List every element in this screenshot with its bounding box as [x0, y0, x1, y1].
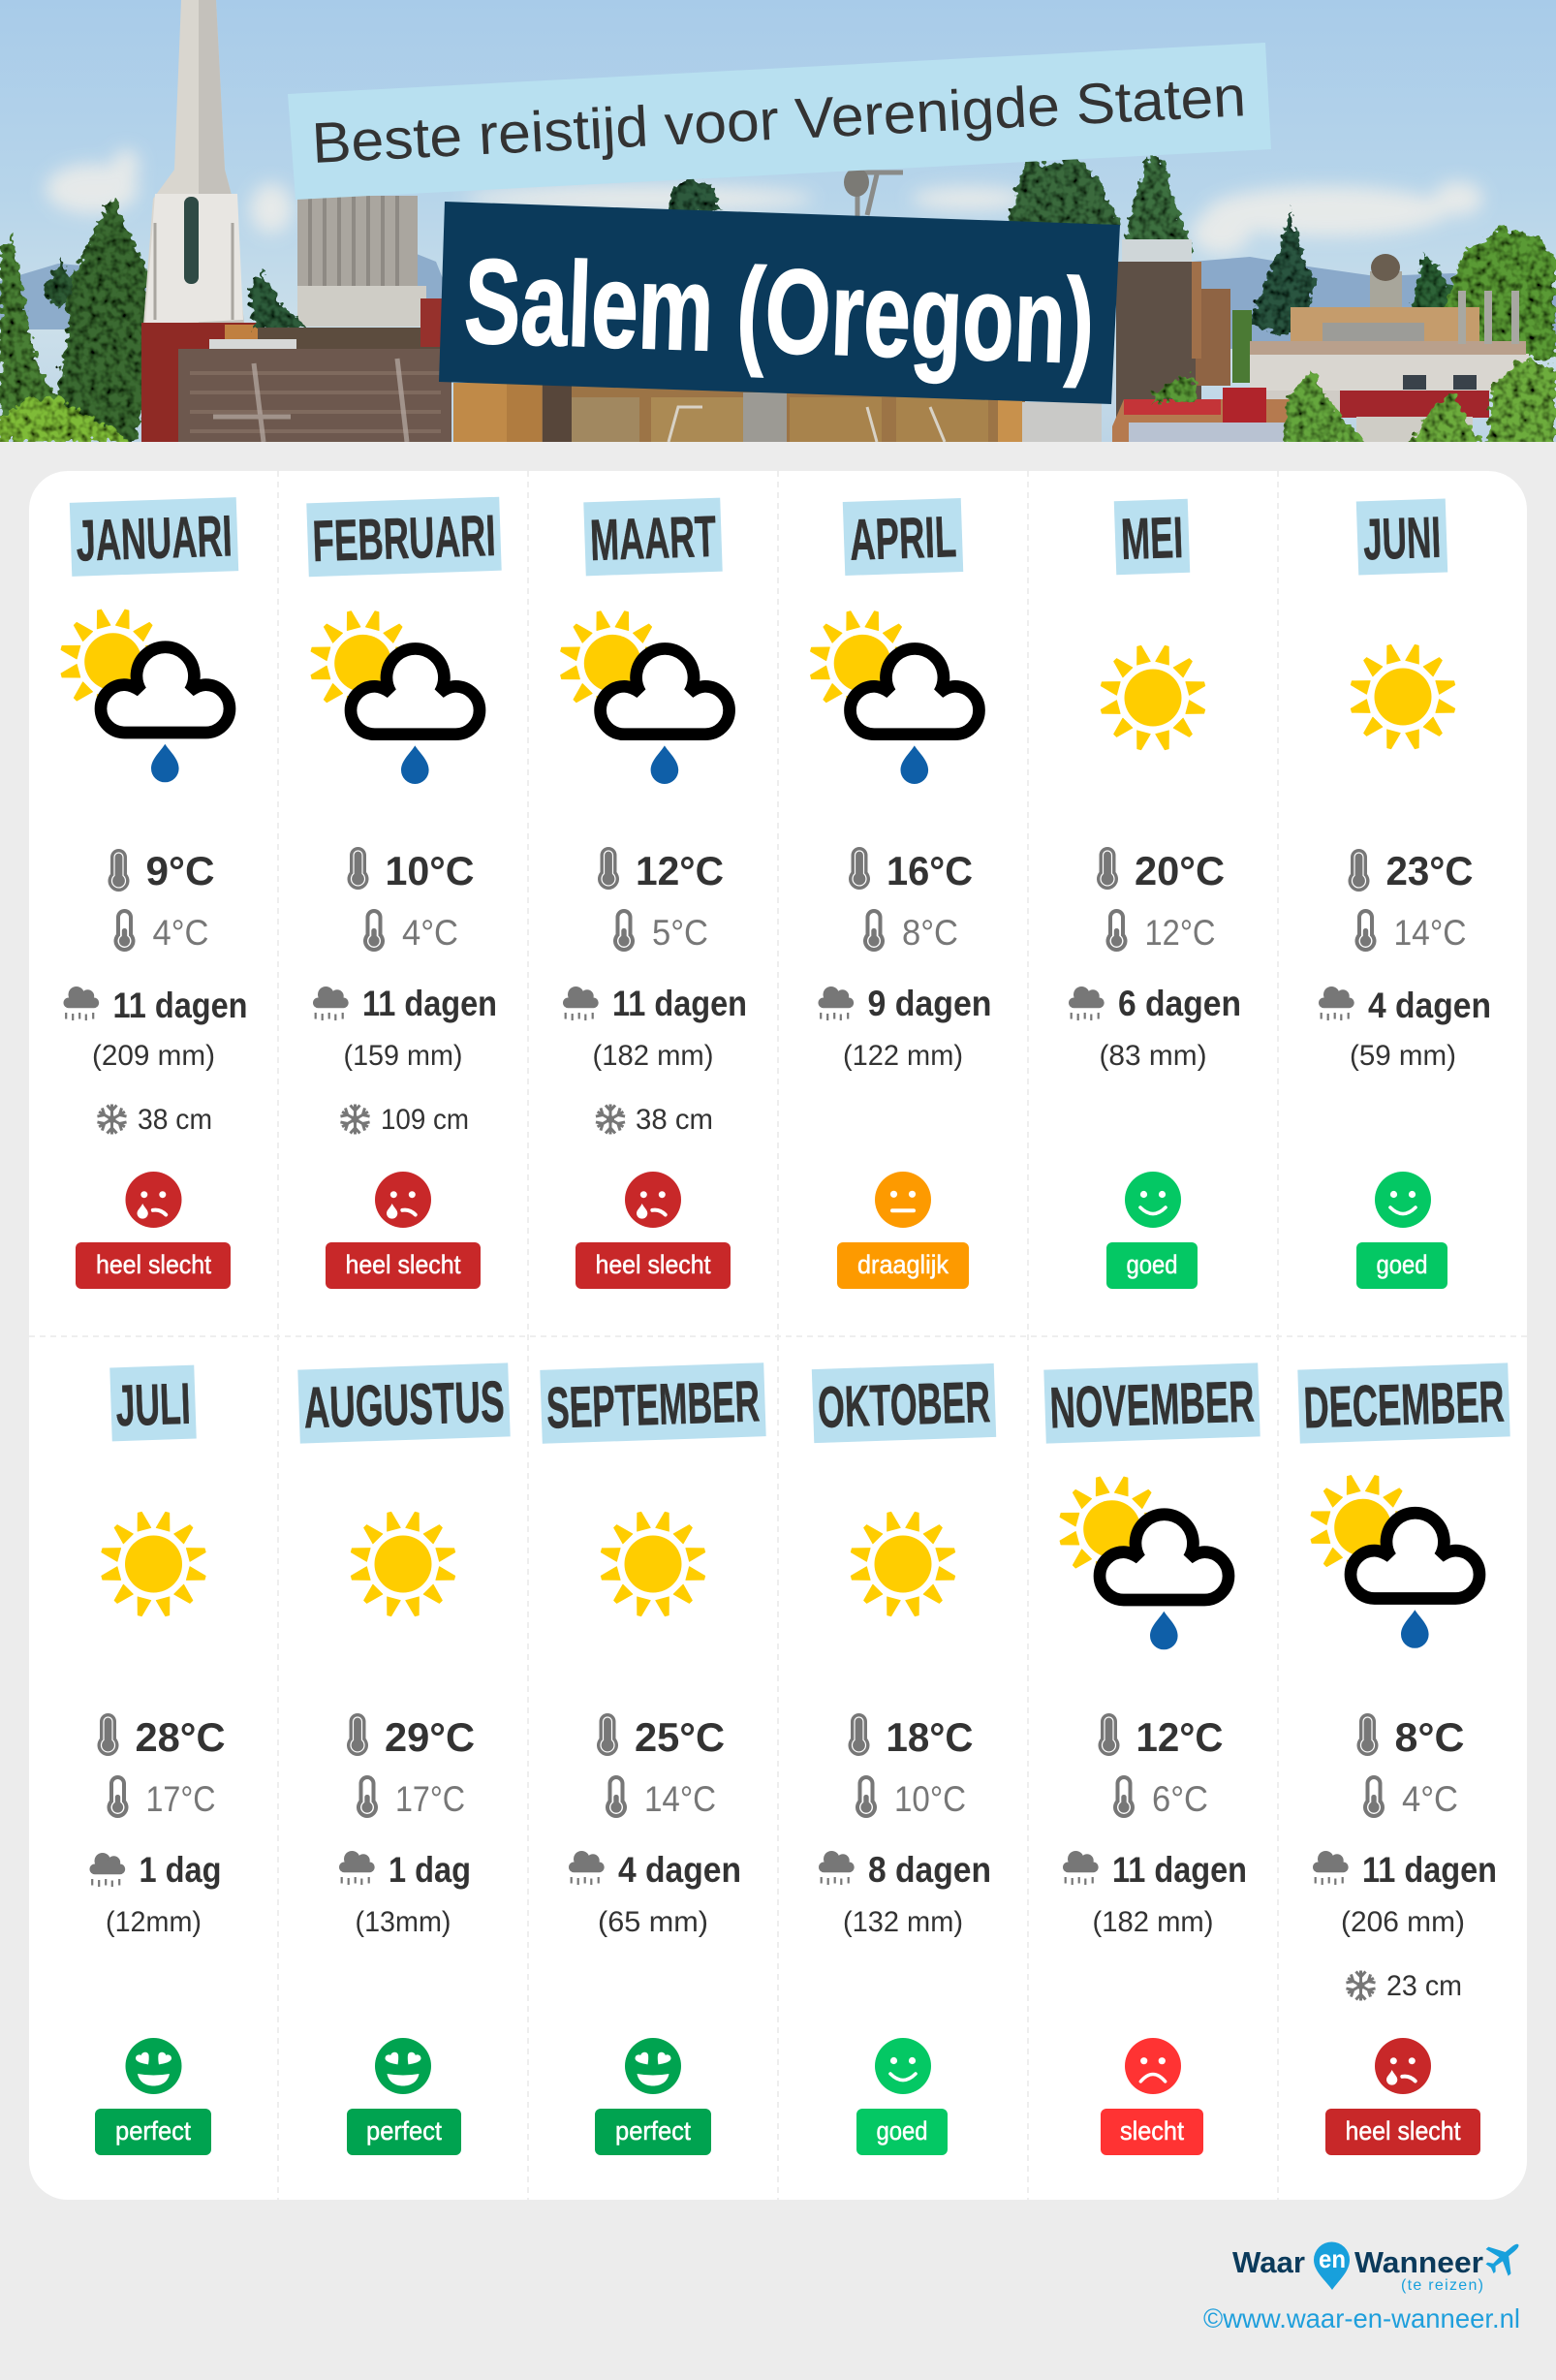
maximum temperature	[109, 848, 215, 893]
panel: september	[540, 1362, 766, 2155]
footer website copyright: ©www.waar-en-wanneer.nl	[1203, 2303, 1520, 2333]
rain days: 1 dag	[140, 1850, 221, 1890]
panel: januari	[60, 497, 248, 1289]
month label	[1043, 1362, 1260, 1444]
minimum temperature: 4°C	[153, 913, 209, 953]
rating badge: goed	[1126, 1250, 1178, 1279]
minimum temperature: 12°C	[1145, 913, 1215, 953]
minimum temperature	[363, 909, 458, 953]
snowfall	[97, 1104, 212, 1136]
minimum temperature	[863, 909, 958, 953]
rating badge: heel slecht	[595, 1250, 711, 1279]
rating face	[625, 2038, 681, 2094]
rain days	[569, 1850, 741, 1890]
water tower	[857, 172, 903, 218]
snowfall	[1346, 1970, 1462, 2002]
month label	[812, 1363, 996, 1443]
rain days	[1319, 986, 1491, 1025]
minimum temperature	[357, 1775, 465, 1819]
rainfall: (65 mm)	[598, 1906, 708, 1938]
rating badge	[1106, 1242, 1198, 1289]
rainfall: (122 mm)	[843, 1040, 963, 1072]
snowfall	[595, 1104, 713, 1136]
panel: augustus	[297, 1362, 511, 2155]
lower right trees	[1283, 370, 1364, 442]
rain days	[64, 986, 248, 1025]
subtitle banner	[288, 43, 1271, 200]
rating badge: perfect	[615, 2116, 691, 2145]
maximum temperature	[1349, 848, 1473, 893]
month label	[843, 498, 963, 576]
rating badge: draaglijk	[857, 1250, 949, 1279]
rainfall: (206 mm)	[1341, 1906, 1465, 1938]
rating badge	[837, 1242, 969, 1289]
maximum temperature: 29°C	[385, 1714, 475, 1760]
campus buildings	[1291, 307, 1479, 341]
icon: sun behind cloud with rain drop	[1059, 1476, 1229, 1649]
rating face	[126, 2038, 182, 2094]
maximum temperature	[97, 1713, 225, 1760]
rating badge	[1356, 1242, 1447, 1289]
panel: april	[809, 498, 992, 1289]
right brown tower	[1122, 239, 1192, 263]
panel: december	[1297, 1362, 1510, 2155]
icon: sun behind cloud with rain drop	[310, 610, 480, 784]
maximum temperature	[849, 847, 973, 893]
minimum temperature	[1113, 1775, 1208, 1819]
snowfall	[340, 1104, 469, 1136]
icon: airplane	[1478, 2231, 1530, 2282]
rating face	[375, 2038, 431, 2094]
minimum temperature: 8°C	[902, 913, 958, 953]
maximum temperature	[597, 1713, 725, 1760]
maximum temperature	[347, 847, 475, 893]
icon: sun behind cloud with rain drop	[809, 610, 979, 784]
maximum temperature: 20°C	[1135, 848, 1225, 893]
panel: februari	[306, 497, 502, 1289]
month label	[306, 497, 502, 577]
rain days: 4 dagen	[1368, 986, 1491, 1025]
rainfall: (209 mm)	[92, 1040, 215, 1072]
maximum temperature	[1099, 1713, 1223, 1760]
maximum temperature: 8°C	[1395, 1714, 1465, 1760]
rating face	[875, 2038, 931, 2094]
rating badge: perfect	[115, 2116, 191, 2145]
month label: SEPTEMBER	[545, 1368, 761, 1441]
title banner	[439, 202, 1120, 404]
footer logo: Waar en Wanneer: Wanneer	[1354, 2245, 1483, 2279]
minimum temperature	[1363, 1775, 1458, 1819]
rainfall: (59 mm)	[1350, 1040, 1456, 1072]
snowfall: 23 cm	[1386, 1970, 1462, 2002]
snowfall: 109 cm	[381, 1104, 469, 1136]
rating badge: slecht	[1120, 2116, 1184, 2145]
month label: APRIL	[849, 504, 957, 573]
footer logo: Waar en Wanneer: (te reizen)	[1401, 2277, 1483, 2294]
rain days: 6 dagen	[1118, 984, 1241, 1023]
rating badge: goed	[1376, 1250, 1428, 1279]
rain days: 11 dagen	[112, 986, 248, 1025]
right conifer and dome	[1252, 204, 1318, 336]
panel: juli	[89, 1365, 225, 2155]
header photo: Salem skyline	[0, 0, 1556, 446]
rating badge	[326, 1242, 481, 1289]
minimum temperature	[1106, 909, 1215, 953]
minimum temperature: 17°C	[145, 1779, 215, 1819]
footer logo: Waar en Wanneer	[1232, 2231, 1530, 2294]
rating face	[1125, 1172, 1181, 1228]
rating face	[625, 1172, 681, 1228]
rain days	[339, 1850, 471, 1890]
snowfall: 38 cm	[636, 1104, 713, 1136]
rating badge: perfect	[366, 2116, 442, 2145]
rain days	[313, 984, 497, 1023]
month label	[297, 1362, 511, 1444]
maximum temperature: 12°C	[636, 848, 724, 893]
panel: oktober	[812, 1363, 996, 2155]
rating face	[126, 1172, 182, 1228]
grey tower	[297, 196, 418, 287]
rating badge	[347, 2109, 461, 2155]
rainfall: (159 mm)	[343, 1040, 463, 1072]
month label: MEI	[1120, 505, 1184, 572]
minimum temperature	[606, 1775, 716, 1819]
maximum temperature: 12°C	[1136, 1714, 1223, 1760]
title banner: Salem (Oregon)	[462, 235, 1096, 390]
church spire and tower	[143, 0, 231, 323]
rain days: 1 dag	[389, 1850, 471, 1890]
maximum temperature: 9°C	[145, 848, 215, 893]
icon: sun	[600, 1511, 706, 1617]
month label: OKTOBER	[817, 1369, 991, 1440]
minimum temperature	[1354, 909, 1467, 953]
subtitle banner: Beste reistijd voor Verenigde Staten	[310, 64, 1247, 175]
minimum temperature	[856, 1775, 966, 1819]
rainfall: (12mm)	[106, 1906, 202, 1938]
rating badge	[95, 2109, 211, 2155]
rating badge	[76, 1242, 231, 1289]
rainfall: (182 mm)	[1093, 1906, 1213, 1938]
white calendar card	[29, 471, 1527, 2200]
minimum temperature: 14°C	[644, 1779, 716, 1819]
rain days	[818, 984, 992, 1023]
rating badge	[1101, 2109, 1203, 2155]
rating face	[1375, 2038, 1431, 2094]
icon: sun	[350, 1511, 456, 1617]
panel: juni	[1319, 498, 1491, 1289]
icon: sun	[1350, 643, 1456, 750]
rain days: 9 dagen	[868, 984, 992, 1023]
rain days	[819, 1850, 991, 1890]
rating badge: goed	[876, 2116, 928, 2145]
rating badge	[1325, 2109, 1480, 2155]
minimum temperature: 17°C	[395, 1779, 465, 1819]
icon: sun behind cloud with rain drop	[60, 609, 230, 782]
maximum temperature: 28°C	[136, 1714, 225, 1760]
right trees	[1444, 228, 1556, 359]
month label: NOVEMBER	[1048, 1369, 1256, 1440]
left conifers	[0, 233, 58, 417]
icon: map pin with en	[1314, 2242, 1350, 2290]
minimum temperature	[613, 909, 708, 953]
month label	[540, 1362, 766, 1444]
maximum temperature	[347, 1713, 475, 1760]
month label: MAART	[589, 504, 717, 573]
minimum temperature: 4°C	[402, 913, 458, 953]
rating face	[875, 1172, 931, 1228]
maximum temperature	[1356, 1713, 1465, 1760]
rain days: 8 dagen	[868, 1850, 991, 1890]
icon: map pin with en: en	[1319, 2244, 1346, 2273]
rating face	[1375, 1172, 1431, 1228]
panel: november	[1043, 1362, 1260, 2155]
poplars	[669, 178, 723, 211]
minimum temperature: 4°C	[1402, 1779, 1458, 1819]
brick buildings	[258, 328, 440, 349]
rating badge: heel slecht	[1345, 2116, 1461, 2145]
rainfall: (182 mm)	[593, 1040, 713, 1072]
maximum temperature	[1097, 847, 1225, 893]
rain days	[1069, 984, 1241, 1023]
month label	[70, 497, 238, 577]
maximum temperature	[598, 847, 724, 893]
footer logo: Waar en Wanneer: Waar	[1232, 2245, 1305, 2279]
minimum temperature	[114, 909, 209, 953]
rain days: 11 dagen	[612, 984, 747, 1023]
red roof building	[1112, 399, 1291, 442]
month label	[583, 498, 723, 576]
panel: maart	[559, 498, 747, 1289]
month label: FEBRUARI	[311, 503, 497, 574]
maximum temperature: 23°C	[1385, 848, 1473, 893]
rainfall: (13mm)	[355, 1906, 451, 1938]
minimum temperature: 10°C	[894, 1779, 966, 1819]
minimum temperature: 6°C	[1152, 1779, 1208, 1819]
icon: sun	[1100, 644, 1206, 751]
month label	[109, 1365, 197, 1441]
rainfall: (132 mm)	[843, 1906, 963, 1938]
rain days	[563, 984, 747, 1023]
minimum temperature: 14°C	[1393, 913, 1467, 953]
rainfall: (83 mm)	[1099, 1040, 1207, 1072]
rating badge	[856, 2109, 948, 2155]
rating face	[375, 1172, 431, 1228]
month label: JULI	[114, 1371, 192, 1438]
minimum temperature	[107, 1775, 215, 1819]
snowfall: 38 cm	[138, 1104, 212, 1136]
icon: sun behind cloud with rain drop	[1310, 1474, 1479, 1648]
rain days: 11 dagen	[362, 984, 497, 1023]
tan block row	[542, 386, 1025, 442]
icon: sun behind cloud with rain drop	[559, 610, 730, 784]
rain days: 11 dagen	[1362, 1850, 1497, 1890]
month label: JANUARI	[75, 503, 233, 574]
month label: JUNI	[1362, 505, 1442, 572]
icon: sun	[850, 1511, 956, 1617]
rain days	[1063, 1850, 1247, 1890]
month label	[1356, 498, 1447, 576]
icon: sun	[101, 1511, 206, 1617]
maximum temperature: 10°C	[386, 848, 475, 893]
rain days: 4 dagen	[618, 1850, 741, 1890]
rating badge	[576, 1242, 731, 1289]
rating badge: heel slecht	[96, 1250, 211, 1279]
rain days	[89, 1850, 221, 1890]
rating badge	[595, 2109, 711, 2155]
month label	[1114, 499, 1190, 575]
maximum temperature: 18°C	[886, 1714, 973, 1760]
rating face	[1125, 2038, 1181, 2094]
panel: mei	[1069, 499, 1241, 1289]
maximum temperature: 25°C	[635, 1714, 725, 1760]
maximum temperature: 16°C	[887, 848, 973, 893]
maximum temperature	[849, 1713, 973, 1760]
minimum temperature: 5°C	[652, 913, 708, 953]
rain days	[1313, 1850, 1497, 1890]
month label: AUGUSTUS	[302, 1369, 506, 1440]
rain days: 11 dagen	[1112, 1850, 1247, 1890]
rating badge: heel slecht	[345, 1250, 461, 1279]
